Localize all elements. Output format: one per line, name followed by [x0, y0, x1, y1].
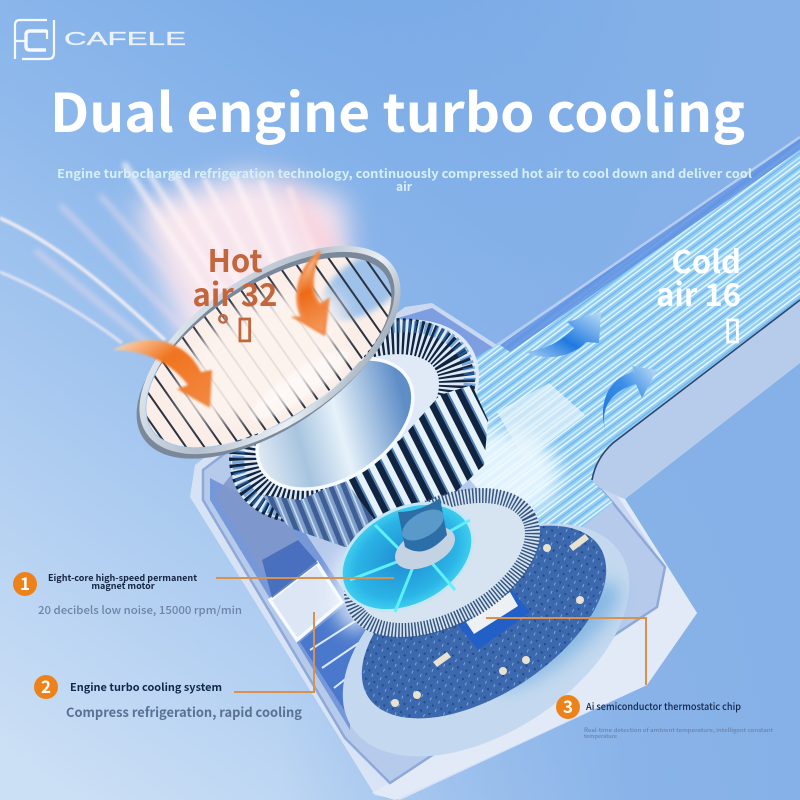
cold air arrows [525, 312, 657, 433]
badge 2 [34, 673, 58, 699]
duct vent panel [497, 383, 585, 460]
duct lower wall [592, 300, 800, 499]
housing roof band [398, 308, 500, 372]
title: Dual engine turbo cooling [50, 72, 745, 148]
bowl [302, 476, 670, 800]
subtitle: Engine turbocharged refrigeration technology, continuously compressed hot air to cool down and deliver cool [57, 165, 752, 182]
subtitle: air [396, 178, 413, 195]
cold air duct [469, 136, 800, 527]
blue arrow lower [603, 366, 657, 433]
cold air label [656, 237, 741, 348]
board components [391, 534, 589, 707]
fine-finned stator ring [319, 458, 565, 668]
motor [319, 458, 565, 668]
ring frame [109, 209, 431, 491]
callout 3 detail [584, 726, 774, 740]
cyan motor disc [323, 482, 491, 632]
badge 3 [556, 693, 580, 719]
hot air label [193, 236, 277, 347]
badge 3: 3 [563, 693, 573, 718]
callout 3 detail: temperature [584, 732, 617, 740]
subtitle [57, 165, 752, 195]
brand name: CAFELE [64, 29, 186, 49]
callout 2 [34, 673, 302, 721]
heat sink left fins [262, 480, 395, 548]
housing outer shell [190, 137, 800, 800]
lower left cooling fins [210, 470, 392, 730]
cold air label: air 16 [656, 270, 741, 315]
badge 1: 1 [20, 570, 30, 595]
badge 2: 2 [41, 673, 51, 698]
hot air label: Hot [207, 236, 263, 281]
callout 1 heading [48, 571, 197, 592]
callout 2 heading: Engine turbo cooling system [70, 680, 222, 695]
orange arrow left [113, 340, 212, 408]
hot air arrows [113, 252, 328, 408]
circuit board [329, 486, 639, 758]
heat sink [195, 278, 515, 562]
housing interior [203, 312, 665, 783]
badge 1 [13, 570, 37, 596]
ring frame back [106, 214, 428, 496]
callout 2 detail: Compress refrigeration, rapid cooling [66, 702, 302, 721]
leader lines [216, 578, 646, 692]
logo mark [15, 20, 54, 59]
duct top edge [500, 137, 800, 352]
hot air label: ° ▯ [217, 302, 253, 347]
fin ring [195, 278, 515, 562]
circuit board bowl [302, 476, 670, 800]
heat sink right fins [345, 385, 488, 550]
callout 1 [13, 570, 242, 618]
callout 1 heading: magnet motor [91, 579, 155, 592]
blue arrow upper [525, 312, 601, 357]
inner core [233, 332, 437, 516]
callout 3 [556, 693, 774, 740]
hot air label: air 32 [193, 270, 277, 315]
grill interior [146, 257, 392, 448]
callout 3 heading: Ai semiconductor thermostatic chip [586, 699, 741, 713]
intake filter ring [136, 246, 400, 459]
orange arrow right [296, 252, 328, 334]
callout 3 detail: Real-time detection of ambient temperature, intelligent constant [584, 726, 774, 734]
brand logo [15, 20, 186, 59]
cold air label: ▯ [724, 303, 741, 348]
motor shaft [388, 498, 462, 578]
hot air rays [0, 165, 350, 355]
device housing [190, 120, 800, 800]
cold air label: Cold [672, 237, 741, 282]
callout 1 heading: Eight-core high-speed permanent [48, 571, 197, 584]
housing white lip [372, 497, 697, 800]
chip [458, 588, 530, 650]
callout 1 detail: 20 decibels low noise, 15000 rpm/min [38, 602, 242, 618]
